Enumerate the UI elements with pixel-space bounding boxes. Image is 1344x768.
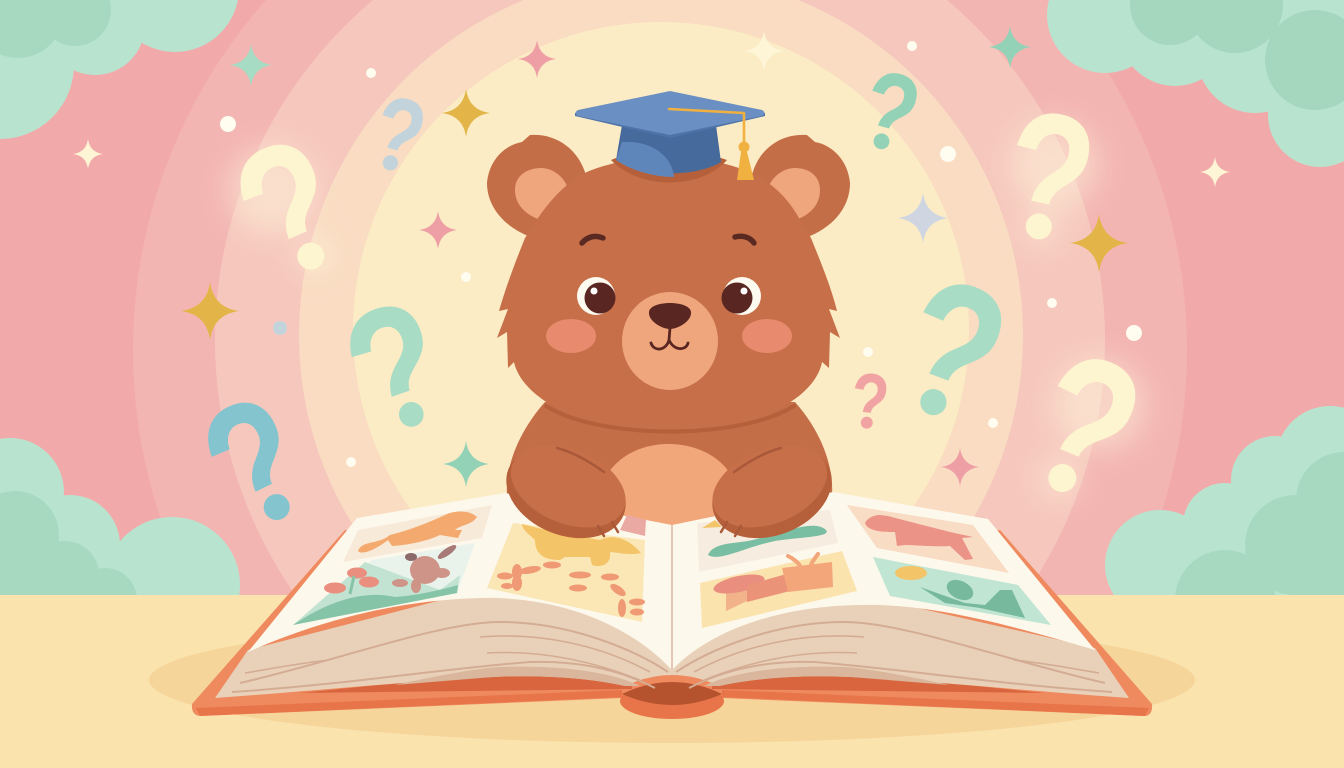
background	[133, 0, 1187, 595]
question mark: cream lower right: ?	[995, 307, 1171, 552]
bear ears	[487, 135, 850, 240]
question mark: cream upper left: ?	[206, 95, 376, 326]
cloud: top left	[0, 0, 239, 139]
picture: orange cat	[343, 505, 492, 562]
cheeks	[546, 319, 596, 353]
book cover	[192, 530, 1152, 716]
question mark: mint top right	[872, 73, 917, 150]
bear body	[507, 402, 832, 545]
question mark glows	[228, 121, 1146, 498]
question mark: mint left: ?	[321, 259, 470, 479]
picture: bunny in meadow	[293, 543, 475, 625]
left page	[248, 493, 672, 670]
picture: green bush	[697, 510, 838, 572]
question mark: blue	[208, 402, 290, 520]
eyebrows	[582, 236, 603, 243]
question mark: large mint right	[920, 284, 1002, 416]
bear head	[497, 156, 840, 433]
cloud: top right	[1047, 0, 1344, 167]
graduation cap	[575, 91, 765, 180]
eyes	[577, 277, 615, 315]
question mark: cream right: ?	[986, 69, 1110, 288]
right page	[672, 492, 1095, 670]
cloud: bottom right	[1105, 406, 1344, 595]
question mark: blue: ?	[174, 356, 339, 574]
cloud: bottom left	[0, 438, 240, 595]
question mark: small pink	[854, 374, 886, 429]
sparkles	[73, 26, 1230, 487]
question mark: large mint right: ?	[869, 232, 1034, 473]
picture: pink pig	[847, 505, 1009, 573]
question mark: small pink: ?	[845, 356, 894, 449]
mouth	[651, 328, 688, 349]
picture: yellow dinosaur and flowers	[487, 515, 646, 622]
floor	[0, 595, 1344, 768]
question mark: silver	[382, 98, 423, 170]
page block	[215, 590, 1129, 698]
nose	[649, 303, 691, 329]
question mark: mint top right: ?	[846, 45, 933, 181]
muzzle	[622, 292, 718, 390]
white dots	[220, 41, 1142, 467]
cap shadow on head	[611, 158, 727, 182]
question mark: cream lower right	[1048, 359, 1136, 492]
question mark: cream right	[1017, 113, 1090, 240]
question mark: silver: ?	[358, 72, 438, 201]
bear paws	[492, 406, 846, 555]
picture: green leaves	[873, 557, 1051, 625]
picture: orange goat	[700, 551, 857, 628]
open book	[192, 492, 1152, 719]
question mark: mint left	[350, 306, 424, 427]
question mark: cream upper left	[240, 144, 324, 270]
